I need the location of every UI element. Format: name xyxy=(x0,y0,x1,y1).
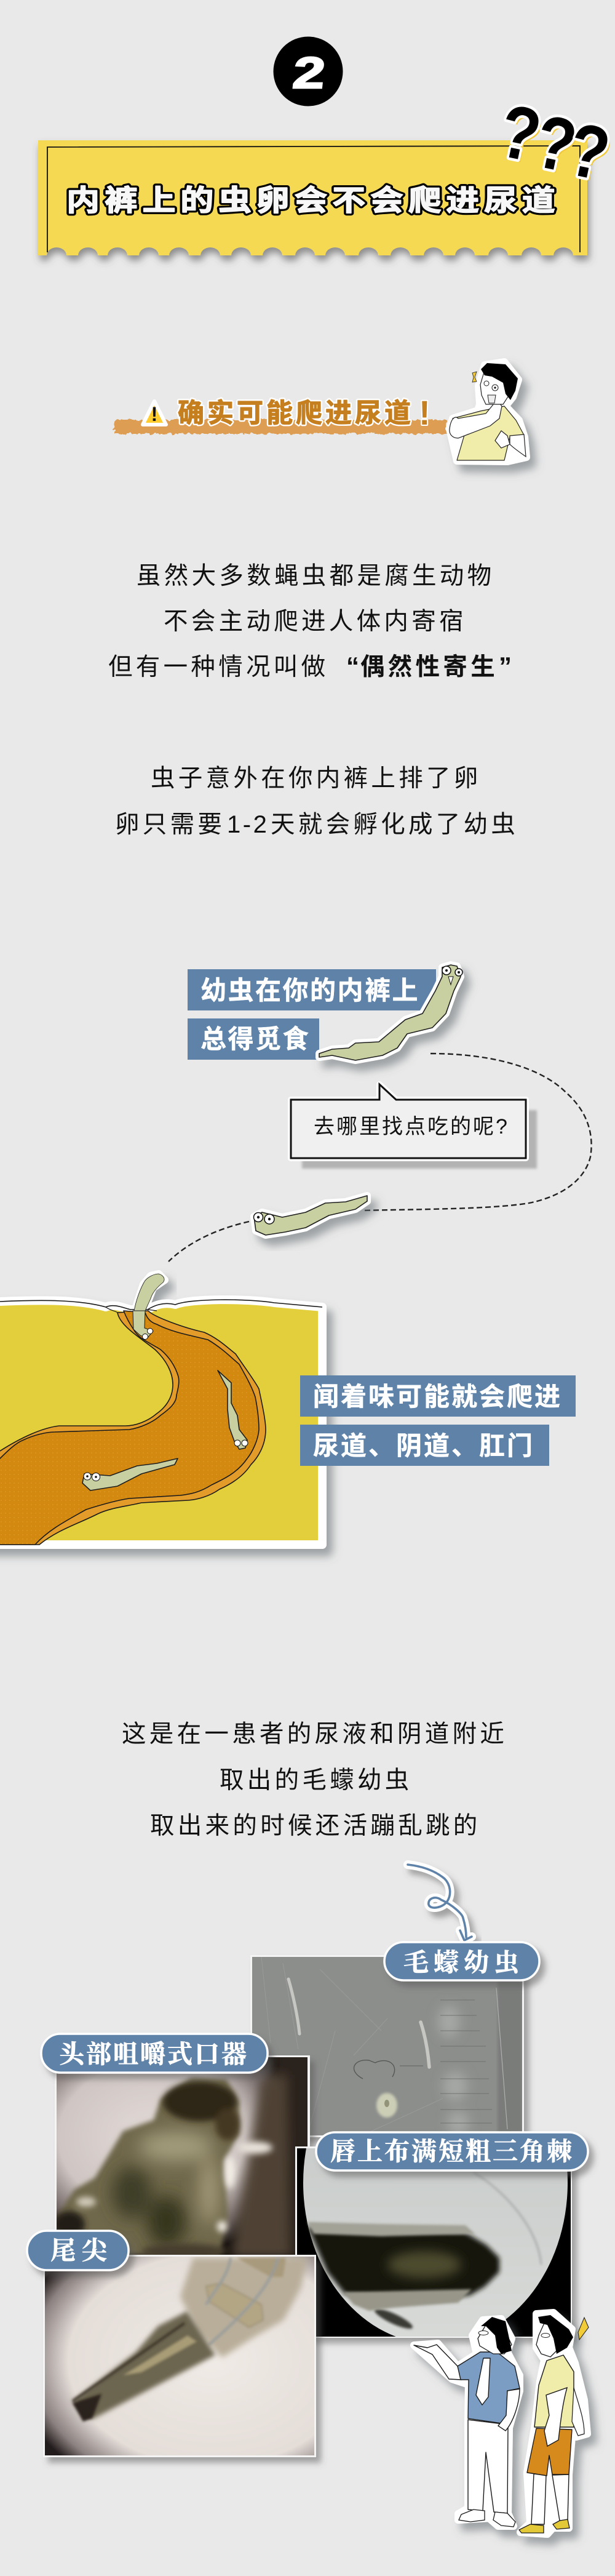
body paragraph one: 不会主动爬进人体内寄宿 xyxy=(164,608,467,635)
blue label: smell and crawl in: 尿道、阴道、肛门 xyxy=(313,1431,534,1460)
body paragraph two xyxy=(115,765,518,838)
number badge 2 xyxy=(273,37,343,106)
inner border line xyxy=(47,146,580,252)
body paragraph three: 这是在一患者的尿液和阴道附近 xyxy=(122,1721,507,1748)
heading text: 确实可能爬进尿道 xyxy=(178,399,414,428)
pill label: lip spines: 唇上布满短粗三角棘 xyxy=(330,2131,574,2167)
worm vertical inside channel xyxy=(218,1370,248,1449)
channel interior xyxy=(0,1311,259,1545)
question marks: ? xyxy=(531,102,586,191)
yellow body tissue xyxy=(0,1300,322,1545)
speech bubble xyxy=(291,1084,537,1169)
blue label: larva on underwear: 幼虫在你的内裤上 xyxy=(200,976,419,1005)
pill label: larva: 毛蠓幼虫 xyxy=(403,1942,524,1978)
worm entering opening xyxy=(133,1274,164,1339)
bold emphasised phrase: ” xyxy=(499,652,512,681)
worm: crawling larva xyxy=(253,1196,367,1235)
question marks xyxy=(493,88,615,199)
bold emphasised phrase: 偶然性寄生 xyxy=(360,654,498,681)
photo: larva head under microscope xyxy=(53,2049,317,2258)
body paragraph two: 天就会孵化成了幼虫 xyxy=(271,811,518,838)
channel wall xyxy=(0,1311,266,1545)
cartoon people looking at the photos xyxy=(414,2313,589,2534)
question marks: ? xyxy=(495,91,550,181)
body paragraph three: 取出的毛蠓幼虫 xyxy=(220,1767,413,1794)
blue label: larva on underwear: 总得觅食 xyxy=(200,1025,310,1054)
dashed path: worm route xyxy=(362,1054,592,1210)
icon: warning triangle xyxy=(143,401,166,425)
dashed path: towards body xyxy=(169,1222,249,1262)
number badge 2: 2 xyxy=(290,48,328,97)
speech bubble: 去哪里找点吃的呢? xyxy=(314,1115,509,1138)
arrow: curly pointer to label xyxy=(408,1865,472,1940)
icon: warning triangle: ! xyxy=(151,403,157,425)
anatomy panel: urethra cross-section xyxy=(0,1274,322,1545)
heading text outline: 确实可能爬进尿道 xyxy=(178,399,414,428)
worm emerging halo xyxy=(135,1274,165,1309)
body paragraph one: 但有一种情况叫做 xyxy=(108,654,328,681)
bold emphasised phrase: “ xyxy=(346,652,359,681)
blue label: larva on underwear xyxy=(188,969,436,1060)
pill label: head mouthparts: 头部咀嚼式口器 xyxy=(59,2034,248,2070)
rough orange brush strip xyxy=(114,420,446,434)
body paragraph three: 取出来的时候还活蹦乱跳的 xyxy=(150,1812,481,1839)
question marks: ? xyxy=(528,98,584,188)
blue label: smell and crawl in xyxy=(300,1375,576,1466)
person: man in yellow shirt and orange shorts xyxy=(519,2313,589,2534)
exclamation mark: ! xyxy=(419,393,430,432)
pill label: tail tip xyxy=(27,2230,129,2270)
banner paper with scalloped bottom xyxy=(38,140,587,255)
body paragraph three xyxy=(122,1721,507,1839)
photo: larva tail under microscope xyxy=(43,2255,316,2457)
worm: upright larva xyxy=(319,965,462,1060)
worm horizontal inside channel xyxy=(82,1458,178,1490)
body paragraph two: 虫子意外在你内裤上排了卵 xyxy=(151,765,482,792)
body paragraph one xyxy=(108,562,512,681)
question marks: ? xyxy=(493,88,548,178)
body paragraph two: 卵只需要 xyxy=(115,811,225,838)
title text thickening: 内裤上的虫卵会不会爬进尿道 xyxy=(66,184,560,217)
title banner xyxy=(38,140,587,255)
photo: larvae specimens on ruler xyxy=(250,1955,524,2137)
photo: larva lip with spines xyxy=(295,2146,581,2347)
blue label: smell and crawl in: 闻着味可能就会爬进 xyxy=(313,1382,562,1411)
warning heading xyxy=(114,393,446,434)
cartoon man worried xyxy=(450,362,526,462)
title text: 内裤上的虫卵会不会爬进尿道 xyxy=(66,184,560,217)
body paragraph one: 虽然大多数蝇虫都是腐生动物 xyxy=(137,562,494,590)
pill label: tail tip: 尾尖 xyxy=(50,2230,113,2266)
body paragraph two: 1-2 xyxy=(227,811,269,838)
person: doctor in blue shirt xyxy=(414,2317,520,2527)
